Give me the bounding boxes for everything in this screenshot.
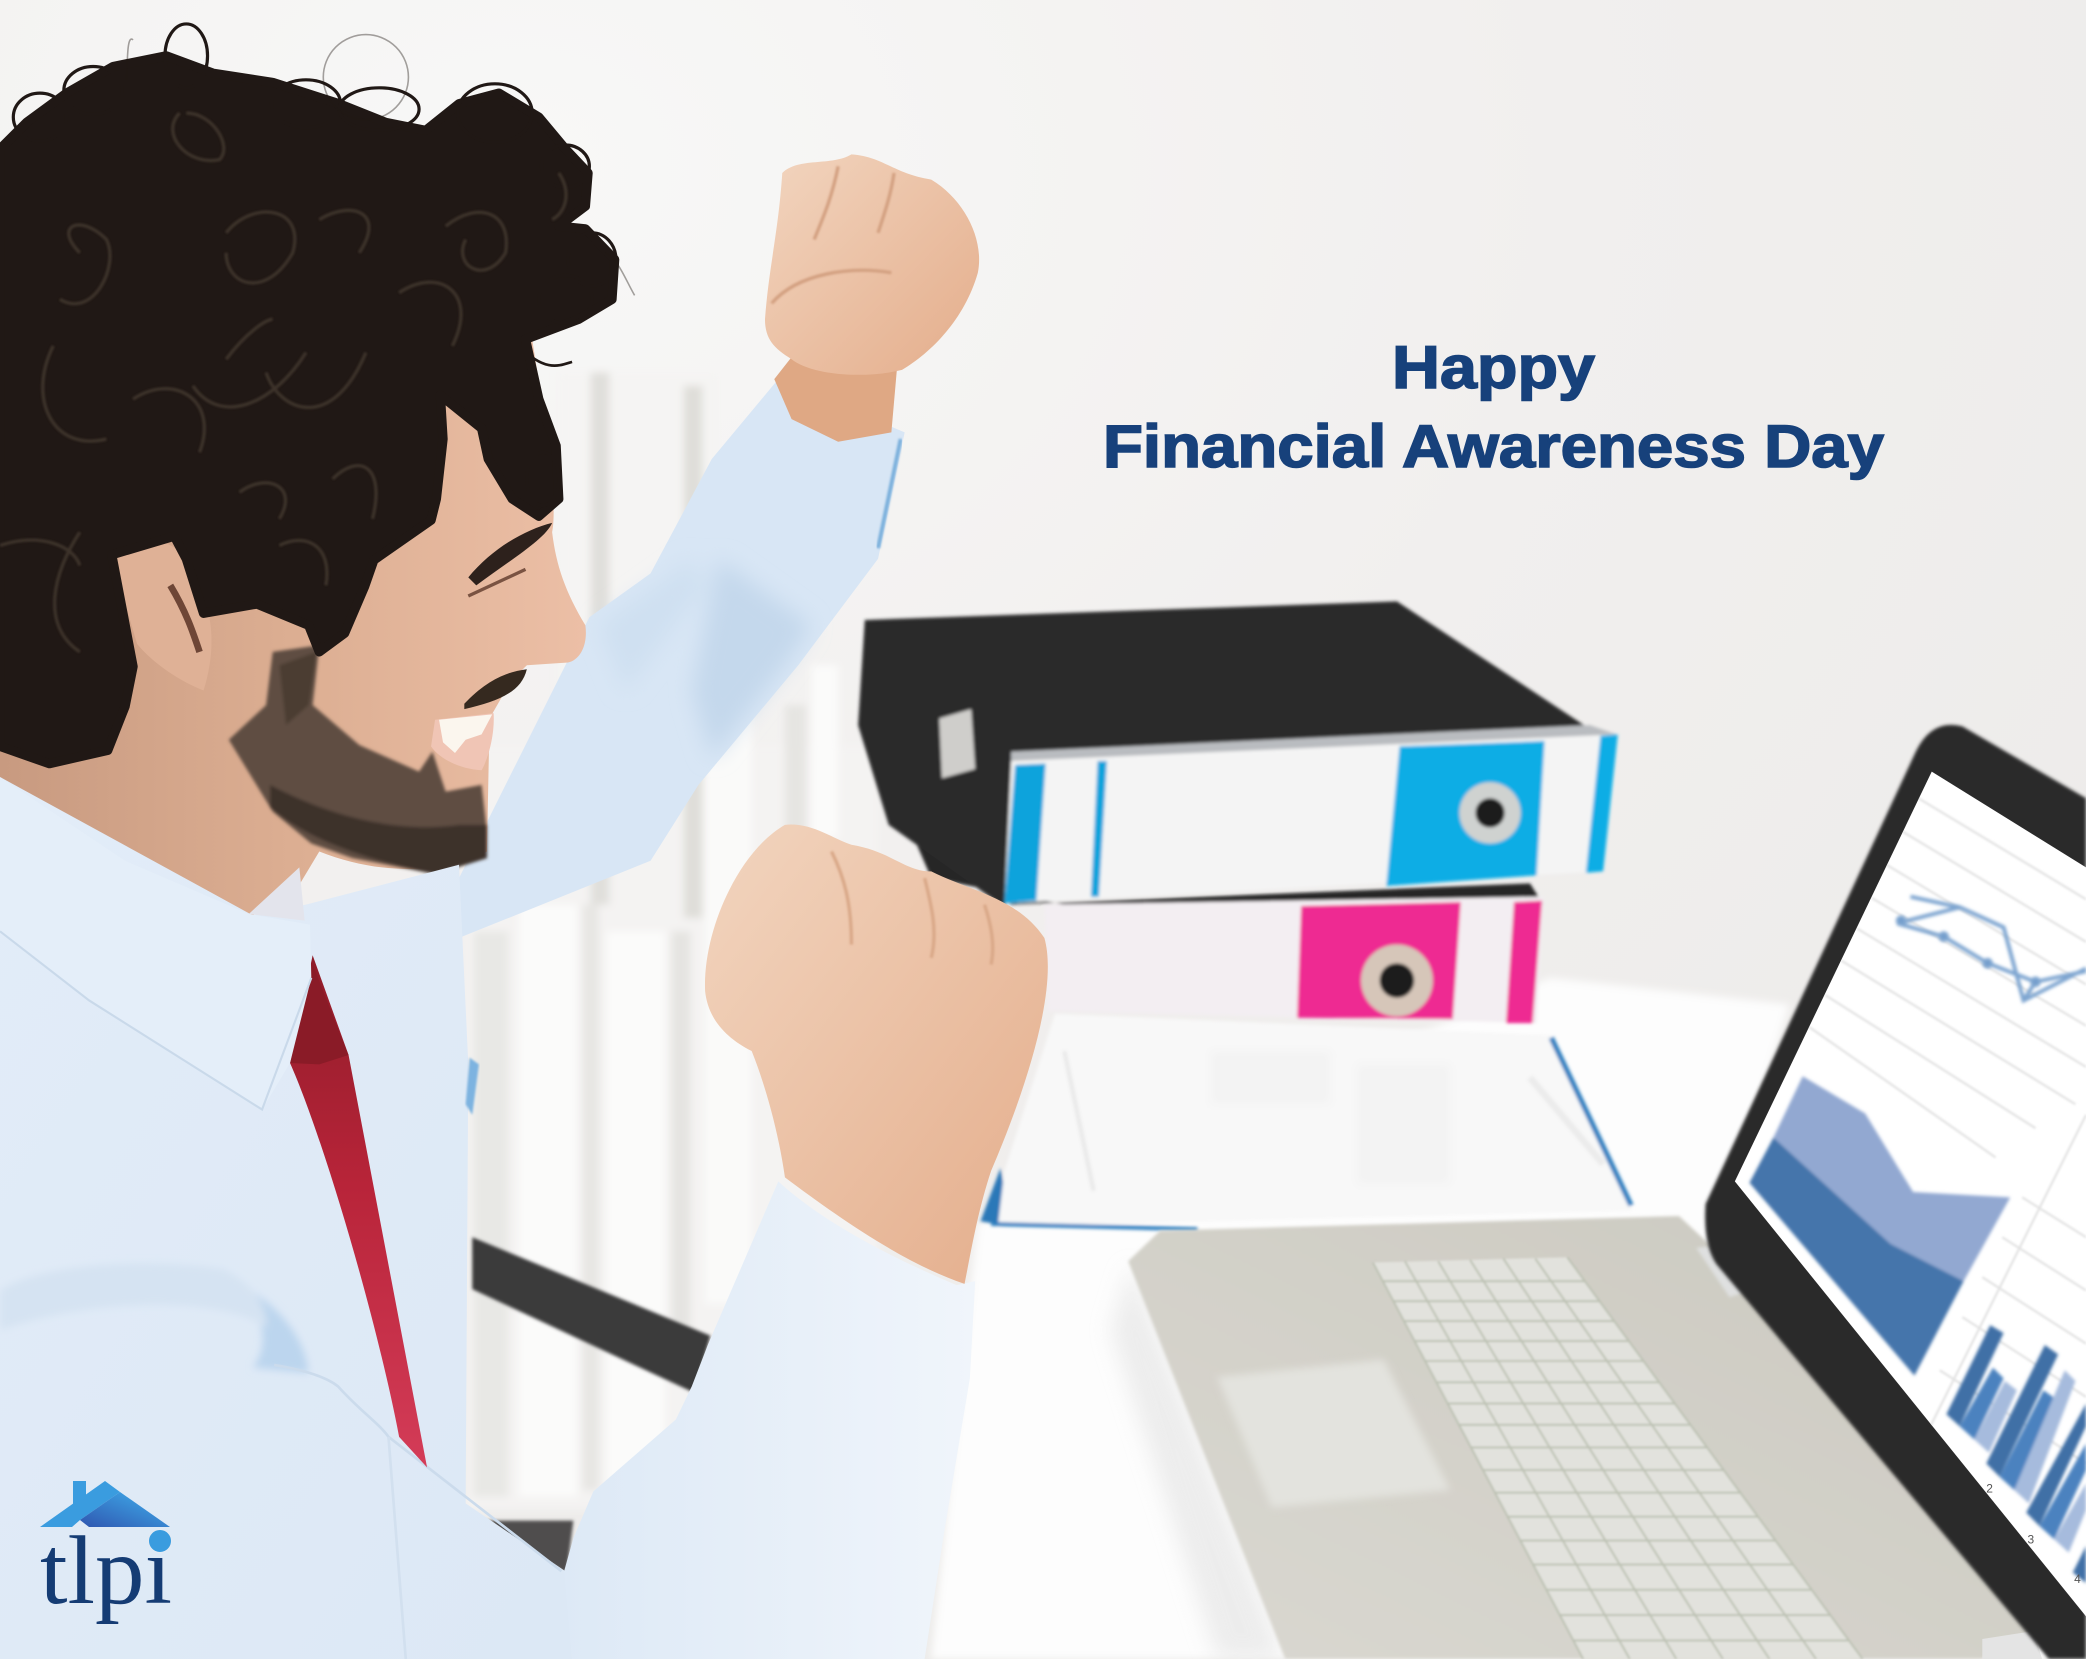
- person: raised fist: [765, 154, 979, 442]
- trackpad: [1217, 1360, 1450, 1507]
- ear: [112, 541, 211, 690]
- sleeve cuff edge: [878, 439, 901, 548]
- chart: line series: [1897, 897, 2086, 1000]
- laptop: [1111, 725, 2086, 1659]
- chart: area series: [1749, 1076, 2010, 1376]
- chart: bar series: [1946, 1325, 2086, 1583]
- binder: pink: [894, 792, 1543, 1023]
- person: forearm sleeve: [564, 1181, 975, 1659]
- laptop screen: [1735, 772, 2086, 1616]
- binder: blue: [858, 601, 1618, 907]
- person: neck and face: [0, 339, 586, 915]
- tie: [290, 955, 427, 1467]
- title: Happy: [1392, 334, 1596, 401]
- radiator: [466, 373, 878, 1510]
- screen gridlines: [1809, 798, 2086, 1463]
- hinge: [1696, 1244, 1759, 1297]
- logo: tlpi: [40, 1481, 172, 1625]
- laptop lid: [1705, 725, 2086, 1659]
- person: raised arm sleeve: [459, 379, 905, 938]
- chart axis labels: [1986, 1482, 2081, 1586]
- laptop shadow: [1111, 1264, 1284, 1659]
- eye and brow: [468, 523, 552, 585]
- mouth: [431, 713, 494, 770]
- title: Financial Awareness Day: [1103, 413, 1885, 480]
- hair curl outline: [13, 24, 616, 506]
- sleeve folds: [599, 559, 812, 758]
- logo wordmark: tlpi: [40, 1517, 172, 1625]
- logo house roof: [40, 1481, 170, 1527]
- chart axis labels: 3: [2028, 1532, 2035, 1546]
- laptop base: [1128, 1216, 2036, 1659]
- title: [1103, 334, 1885, 480]
- logo dot: [148, 1530, 172, 1552]
- shirt folds: [0, 1263, 309, 1373]
- hair strand highlights: [0, 113, 566, 652]
- collar: [0, 777, 311, 1110]
- beard: [229, 645, 487, 874]
- shirt gap shadow: [466, 1058, 479, 1115]
- chart axis labels: 2: [1986, 1482, 1993, 1496]
- chart axis labels: 4: [2074, 1572, 2081, 1586]
- clipboard with papers: [981, 1014, 1632, 1229]
- desk surface: [931, 978, 2086, 1659]
- keyboard: [1373, 1257, 1863, 1659]
- moustache: [464, 669, 527, 709]
- stacked binders: [858, 601, 1618, 1023]
- person: torso shirt: [0, 777, 572, 1659]
- person: front fist: [705, 825, 1048, 1284]
- chair: [472, 1237, 710, 1574]
- person: hair: [0, 24, 635, 764]
